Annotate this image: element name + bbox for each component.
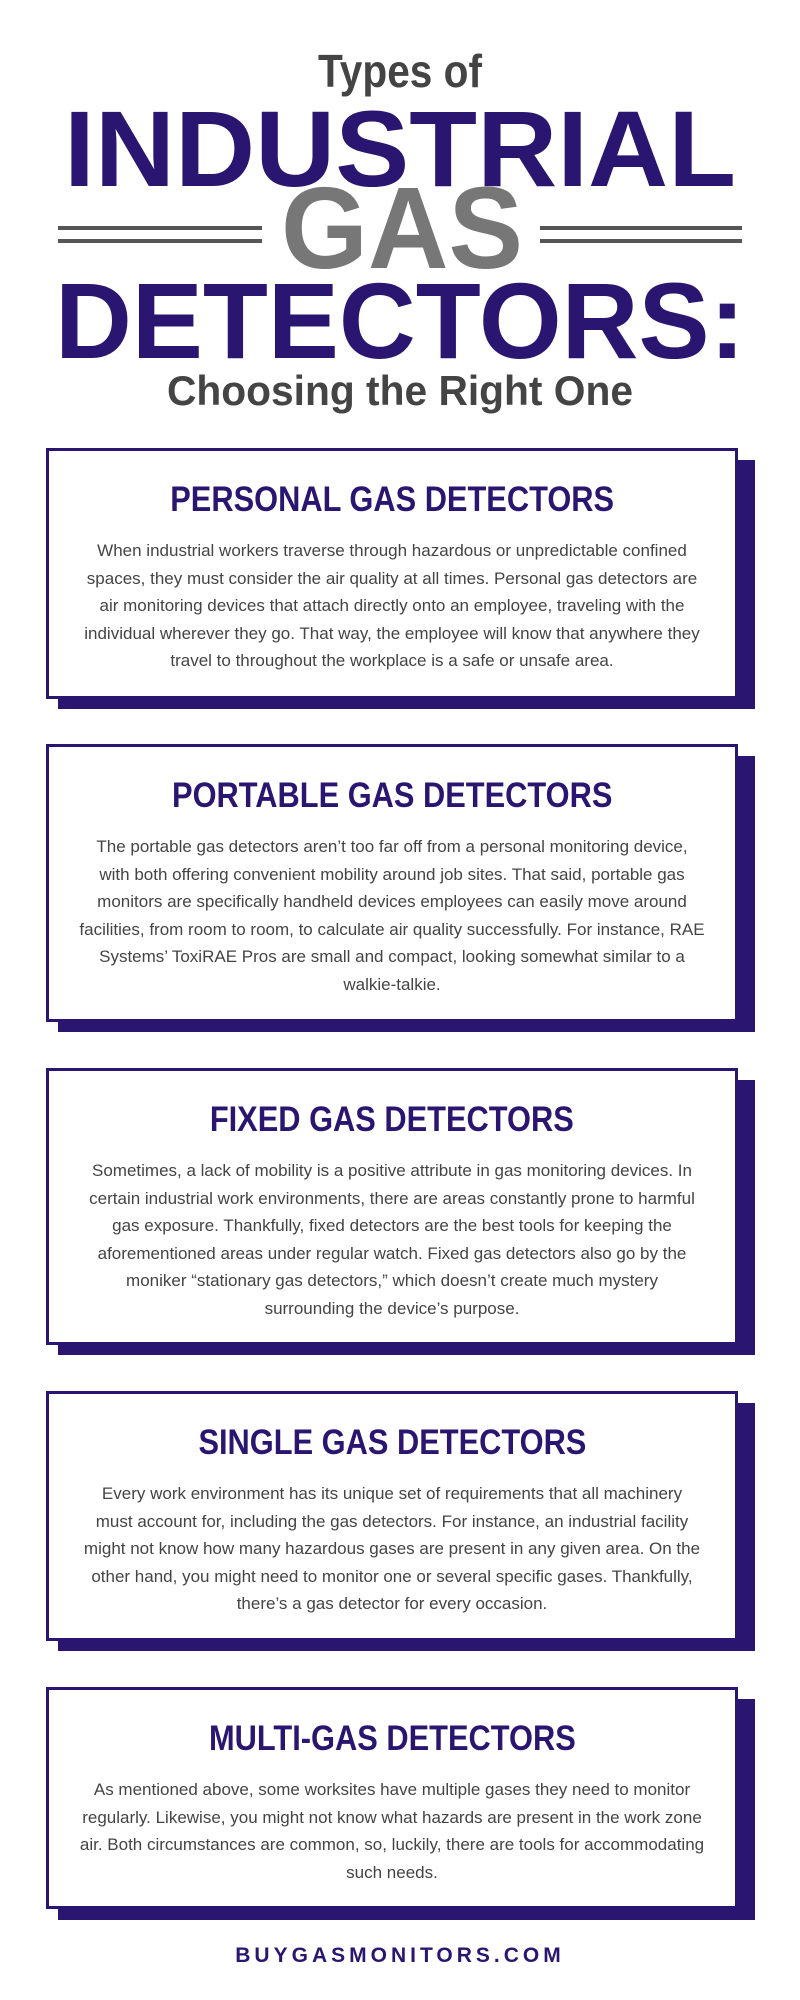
- footer: BUYGASMONITORS.COM: [235, 1944, 565, 1967]
- title: DETECTORS:: DETECTORS:: [55, 260, 745, 381]
- text block: gas exposure. Thankfully, fixed detectors are the best tools for keeping the: [112, 1216, 672, 1235]
- text block: aforementioned areas under regular watch. Fixed gas detectors also go by the: [98, 1244, 686, 1262]
- text block: monitors are specifically handheld devices employees can easily move around: [97, 892, 687, 911]
- text block: must account for, including the gas detectors. For instance, an industrial facility: [96, 1512, 688, 1530]
- panel: single gas detectors: [46, 1391, 738, 1641]
- decorative lines: [58, 228, 742, 241]
- text block: regularly. Likewise, you might not know what hazards are present in the work zone: [82, 1808, 702, 1826]
- heading: PERSONAL GAS DETECTORS: [170, 480, 614, 519]
- text block: there’s a gas detector for every occasion.: [237, 1594, 547, 1613]
- text block: other hand, you might need to monitor one or several specific gases. Thankfully,: [91, 1566, 693, 1586]
- heading: SINGLE GAS DETECTORS: [198, 1423, 586, 1462]
- text block: facilities, from room to room, to calculate air quality successfully. For instance, RAE: [79, 920, 705, 938]
- text block: with both offering convenient mobility around job sites. That said, portable gas: [99, 864, 685, 884]
- text block: The portable gas detectors aren’t too far off from a personal monitoring device,: [96, 837, 688, 856]
- panel: personal gas detectors: [46, 448, 738, 699]
- text block: [79, 837, 705, 994]
- title: Types of: Types of: [318, 45, 483, 97]
- text block: [84, 541, 700, 670]
- subtitle: Choosing the Right One: [167, 367, 633, 414]
- panel: fixed gas detectors: [46, 1068, 738, 1345]
- text block: such needs.: [346, 1862, 438, 1882]
- text block: When industrial workers traverse through hazardous or unpredictable confined: [97, 541, 687, 560]
- text block: [89, 1161, 695, 1318]
- text block: walkie-talkie.: [343, 974, 441, 994]
- text block: moniker “stationary gas detectors,” which doesn’t create much mystery: [126, 1271, 658, 1290]
- text block: spaces, they must consider the air quality at all times. Personal gas detectors are: [87, 568, 697, 588]
- title: INDUSTRIAL: INDUSTRIAL: [64, 88, 736, 209]
- panel: multi-gas detectors: [46, 1687, 738, 1909]
- text block: surrounding the device’s purpose.: [265, 1298, 519, 1318]
- text block: travel to throughout the workplace is a safe or unsafe area.: [170, 651, 614, 670]
- title: GAS: GAS: [281, 163, 523, 293]
- text block: [84, 1484, 700, 1613]
- header title: [55, 45, 745, 414]
- text block: Systems’ ToxiRAE Pros are small and compact, looking somewhat similar to a: [99, 947, 685, 966]
- text block: Sometimes, a lack of mobility is a positive attribute in gas monitoring devices. In: [92, 1161, 692, 1180]
- heading: FIXED GAS DETECTORS: [210, 1100, 574, 1139]
- panel: portable gas detectors: [46, 744, 738, 1022]
- text block: might not know how many hazardous gases are present in any given area. On the: [84, 1539, 700, 1558]
- text block: Every work environment has its unique set of requirements that all machinery: [102, 1484, 682, 1503]
- heading: PORTABLE GAS DETECTORS: [172, 776, 612, 815]
- text block: certain industrial work environments, there are areas constantly prone to harmful: [89, 1188, 695, 1208]
- text block: air monitoring devices that attach directly onto an employee, traveling with the: [100, 596, 684, 615]
- heading: MULTI-GAS DETECTORS: [209, 1719, 575, 1758]
- text block: individual wherever they go. That way, the employee will know that anywhere they: [84, 624, 700, 642]
- text block: [80, 1780, 704, 1882]
- text block: air. Both circumstances are common, so, luckily, there are tools for accommodating: [80, 1835, 704, 1854]
- text block: As mentioned above, some worksites have multiple gases they need to monitor: [94, 1780, 690, 1799]
